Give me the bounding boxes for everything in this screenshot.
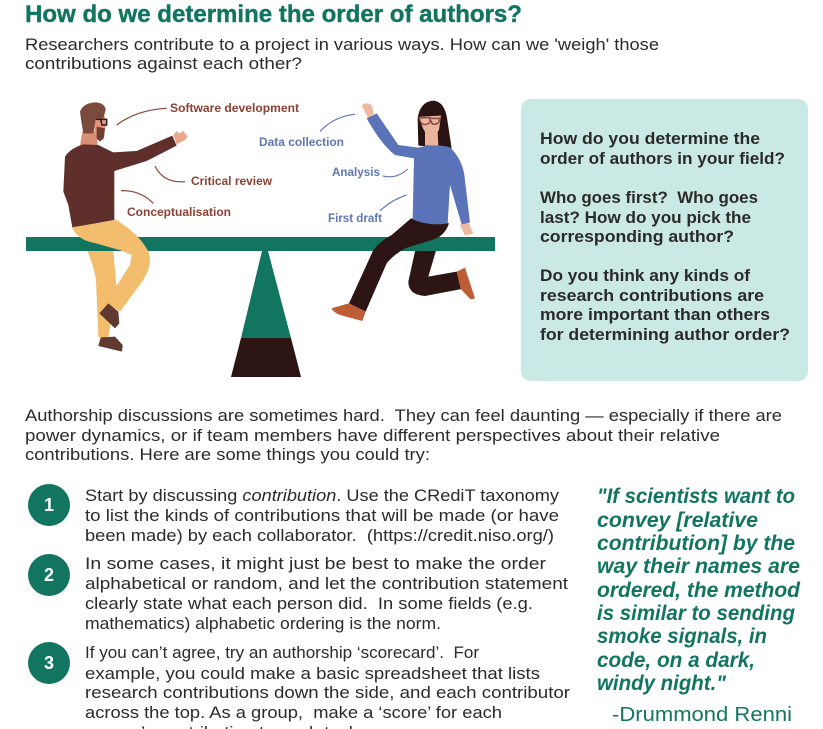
woman's contribution labels: First draft xyxy=(328,213,382,225)
panel: discussion questions: research contributions are xyxy=(540,287,764,305)
pull quote: windy night." xyxy=(597,671,727,695)
panel: discussion questions: corresponding author? xyxy=(540,228,734,246)
quote attribution: -Drummond Renni xyxy=(612,703,792,726)
intro text xyxy=(25,36,659,73)
woman's contribution labels: Analysis xyxy=(332,167,380,179)
step 2: In some cases, it might just be best to make the order xyxy=(85,555,547,573)
man's lower leg xyxy=(87,250,117,337)
man's contribution labels xyxy=(117,103,299,219)
man's contribution labels: Conceptualisation xyxy=(127,207,231,219)
man's contribution labels: Software development xyxy=(170,103,299,115)
pull quote: way their names are xyxy=(597,554,800,578)
authorship discussion paragraph: power dynamics, or if team members have different perspectives about their relative xyxy=(25,427,720,445)
step 3: 3 xyxy=(44,653,54,673)
pull quote: is similar to sending xyxy=(597,601,795,625)
authorship discussion paragraph: Authorship discussions are sometimes hard. They can feel daunting — especially if there are xyxy=(25,407,782,425)
woman's contribution labels xyxy=(259,114,408,225)
intro text: contributions against each other? xyxy=(25,55,302,73)
step 3: example, you could make a basic spreadsheet that lists xyxy=(85,665,540,683)
step 3: research contributions down the side, and each contributor xyxy=(85,684,571,702)
pull quote: smoke signals, in xyxy=(597,624,767,648)
title: How do we determine the order of authors? xyxy=(25,1,522,28)
step 2: mathematics) alphabetic ordering is the norm. xyxy=(85,615,441,633)
step 3: If you can’t agree, try an authorship ‘scorecard’. For xyxy=(85,644,480,662)
step 2 xyxy=(28,554,568,633)
step 2: 2 xyxy=(44,565,54,585)
pull quote: "If scientists want to xyxy=(597,484,795,508)
panel: discussion questions: order of authors in your field? xyxy=(540,150,785,168)
seesaw beam xyxy=(26,237,495,251)
step 3 xyxy=(28,642,571,729)
pull quote: ordered, the method xyxy=(597,578,801,602)
step 3: across the top. As a group, make a ‘score’ for each xyxy=(85,704,502,722)
man upper body xyxy=(63,102,188,228)
man legs and shoes xyxy=(72,220,150,352)
woman front leg and shoe xyxy=(332,218,473,321)
step 2: alphabetical or random, and let the contribution statement xyxy=(85,575,568,593)
authorship discussion paragraph: contributions. Here are some things you could try: xyxy=(25,446,430,464)
step 1: Start by discussing contribution . Use the CRediT taxonomy xyxy=(85,487,560,505)
step 1 xyxy=(28,484,560,545)
step 1: 1 xyxy=(44,495,54,515)
panel: discussion questions xyxy=(521,99,808,381)
pull quote: convey [relative xyxy=(597,508,758,532)
pull quote xyxy=(597,484,801,726)
authorship discussion paragraph xyxy=(25,407,782,464)
woman figure xyxy=(332,101,473,321)
woman's contribution labels: Data collection xyxy=(259,137,344,149)
woman upper body xyxy=(362,101,470,224)
step 1: to list the kinds of contributions that will be made (or have xyxy=(85,507,559,525)
man figure xyxy=(63,102,188,352)
intro text: Researchers contribute to a project in various ways. How can we 'weigh' those xyxy=(25,36,659,54)
man's contribution labels: Critical review xyxy=(191,176,272,188)
woman's back leg and shoe xyxy=(408,248,475,299)
panel: discussion questions: for determining author order? xyxy=(540,326,790,344)
panel: discussion questions: last? How do you pick the xyxy=(540,209,751,227)
panel: discussion questions: Do you think any kinds of xyxy=(540,267,751,285)
panel: discussion questions: How do you determine the xyxy=(540,130,760,148)
pull quote: contribution] by the xyxy=(597,531,795,555)
pull quote: code, on a dark, xyxy=(597,648,755,672)
step 1: been made) by each collaborator. (https://credit.niso.org/) xyxy=(85,527,554,545)
panel: discussion questions: Who goes first? Who goes xyxy=(540,189,758,207)
seesaw base xyxy=(231,251,301,377)
step 2: clearly state what each person did. In some fields (e.g. xyxy=(85,595,533,613)
panel: discussion questions: more important than others xyxy=(540,306,770,324)
illustration: seesaw with two researchers xyxy=(26,101,495,377)
